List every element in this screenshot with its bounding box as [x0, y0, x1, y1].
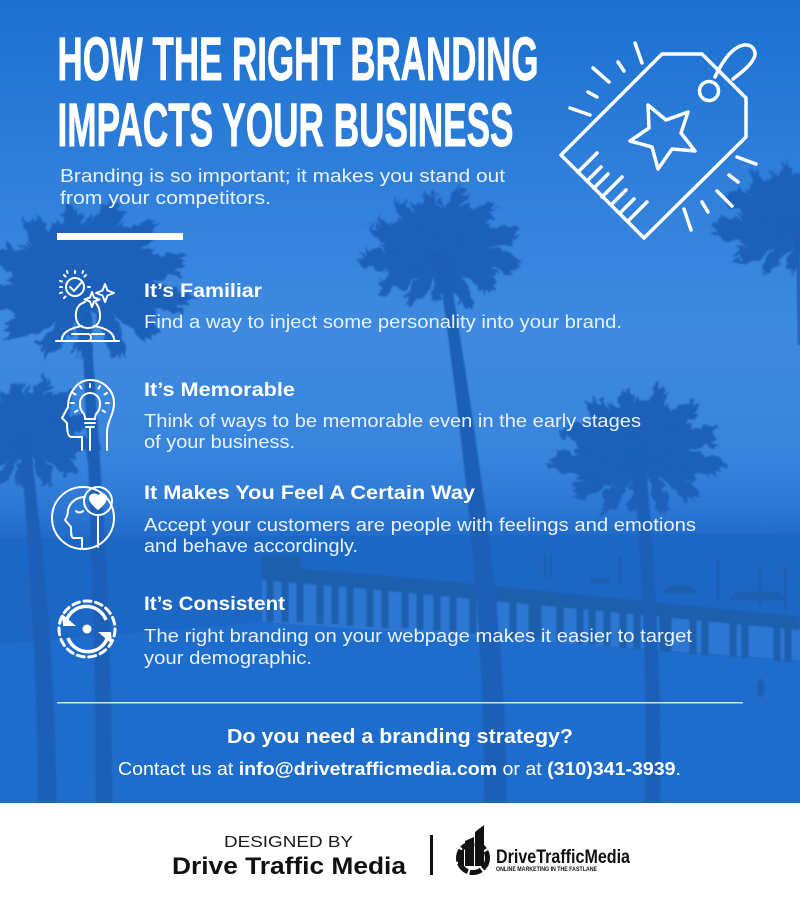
item: It's Familiar: Find a way to inject some personality into your brand. — [144, 312, 622, 332]
footer band — [0, 803, 800, 907]
icon: price tag with star — [561, 43, 756, 238]
item: It's Familiar: It’s Familiar — [144, 281, 263, 302]
item: It's Consistent: It’s Consistent — [144, 594, 286, 615]
designed by credit: DESIGNED BY — [224, 834, 353, 851]
item: It's Memorable — [62, 380, 641, 452]
accent bar — [57, 233, 183, 240]
item: It Makes You Feel A Certain Way — [52, 483, 696, 556]
item: It Makes You Feel A Certain Way: Accept your customers are people with feelings and emotions — [144, 515, 696, 535]
icon: person with check badge and sparkles — [56, 271, 119, 341]
call to action — [118, 726, 681, 779]
item: It's Consistent: The right branding on your webpage makes it easier to target — [144, 626, 692, 646]
icon: head with light bulb — [62, 380, 114, 450]
footer separator — [430, 835, 433, 875]
icon: circular arrows with dashed ring — [59, 601, 115, 657]
item: It Makes You Feel A Certain Way: It Makes You Feel A Certain Way — [144, 483, 475, 504]
designed by credit — [172, 834, 407, 880]
intro text: Branding is so important; it makes you stand out — [60, 166, 505, 186]
item: It's Memorable: of your business. — [144, 432, 295, 452]
item: It's Consistent — [59, 594, 692, 668]
intro text — [60, 166, 505, 208]
logo: Drive Traffic Media: ONLINE MARKETING IN THE FASTLANE — [496, 867, 597, 873]
item: It's Memorable: Think of ways to be memorable even in the early stages — [144, 411, 641, 431]
item: It Makes You Feel A Certain Way: and behave accordingly. — [144, 536, 358, 556]
call to action: Do you need a branding strategy? — [227, 726, 573, 748]
item: It's Consistent: your demographic. — [144, 648, 312, 668]
item: It's Memorable: It’s Memorable — [144, 380, 295, 401]
title — [58, 25, 538, 159]
logo: Drive Traffic Media — [458, 825, 630, 873]
logo: Drive Traffic Media: DriveTrafficMedia — [496, 847, 630, 868]
divider line — [57, 702, 743, 704]
intro text: from your competitors. — [60, 188, 271, 208]
icon: head with heart in circle — [52, 487, 114, 549]
call to action: Contact us at info@drivetrafficmedia.com or at (310)341-3939 . — [118, 759, 681, 779]
designed by credit: Drive Traffic Media — [172, 853, 407, 880]
item: It's Familiar — [56, 271, 622, 341]
